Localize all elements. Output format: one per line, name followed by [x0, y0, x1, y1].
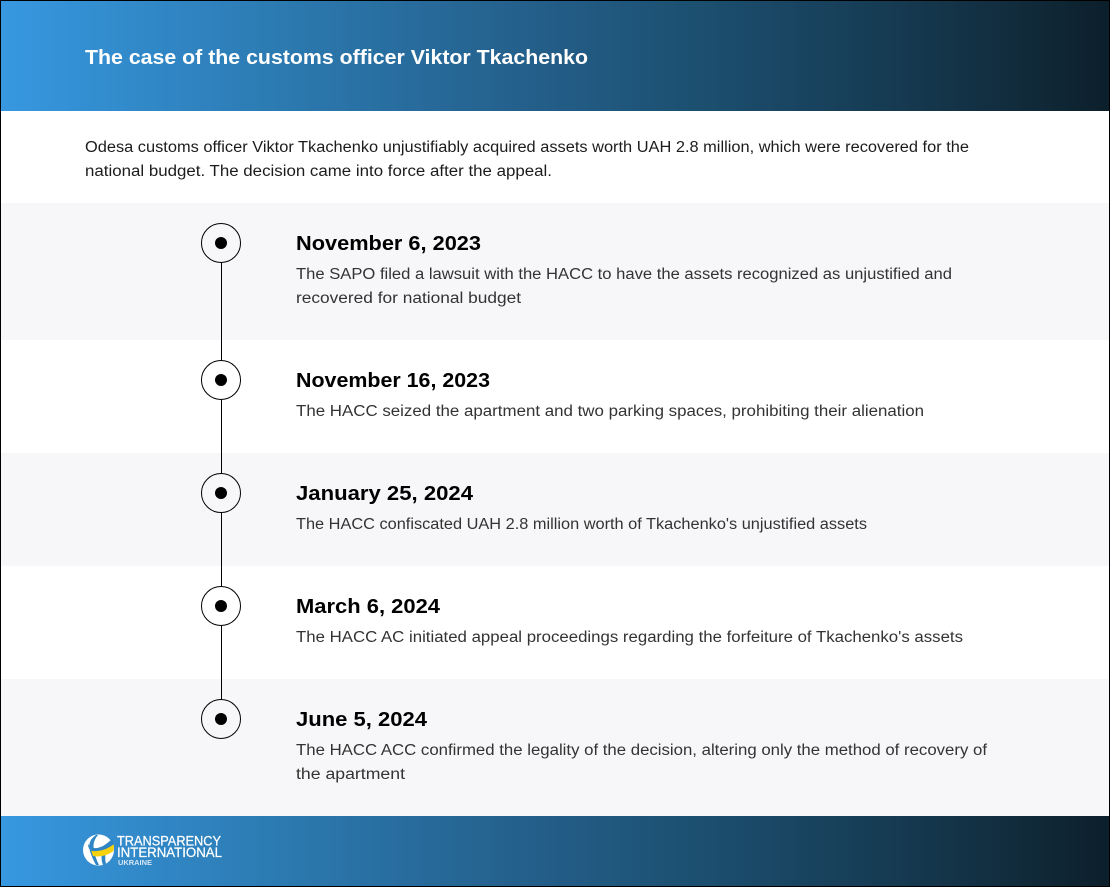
logo wordmark: UKRAINE [118, 860, 152, 867]
intro text: Odesa customs officer Viktor Tkachenko unjustifiably acquired assets worth UAH 2.8 million, which were recovered for the [85, 139, 969, 156]
event: June 5, 2024: June 5, 2024 [296, 708, 428, 731]
event: November 16, 2023: November 16, 2023 [296, 369, 490, 392]
icon: Transparency International logo [83, 834, 114, 866]
event: November 6, 2023 [296, 232, 952, 307]
timeline connector line [220, 243, 222, 719]
event: March 6, 2024 [296, 595, 963, 646]
event: November 6, 2023: recovered for national budget [296, 290, 522, 307]
event: November 16, 2023 [296, 369, 924, 420]
logo wordmark: INTERNATIONAL [117, 845, 222, 860]
timeline marker: March 6, 2024 [202, 586, 240, 626]
event: March 6, 2024: March 6, 2024 [296, 595, 441, 618]
event: January 25, 2024: The HACC confiscated UAH 2.8 million worth of Tkachenko's unjustified assets [296, 516, 867, 533]
timeline marker: June 5, 2024 [202, 700, 240, 738]
event: March 6, 2024: The HACC AC initiated appeal proceedings regarding the forfeiture of Tkachenko's assets [296, 629, 963, 646]
event: November 16, 2023: The HACC seized the apartment and two parking spaces, prohibiting their alienation [296, 403, 924, 420]
header banner [0, 0, 1110, 111]
footer banner [0, 816, 1110, 887]
timeline marker: November 16, 2023 [202, 360, 240, 400]
event: January 25, 2024 [296, 482, 867, 533]
timeline marker: January 25, 2024 [202, 474, 240, 512]
intro text: national budget. The decision came into force after the appeal. [85, 163, 552, 180]
logo wordmark: TRANSPARENCY [117, 834, 221, 848]
event: June 5, 2024: The HACC ACC confirmed the legality of the decision, altering only the method of recovery of [296, 742, 988, 759]
event: June 5, 2024 [296, 708, 988, 783]
event: November 6, 2023: November 6, 2023 [296, 232, 481, 255]
logo wordmark [117, 834, 222, 867]
title: The case of the customs officer Viktor Tkachenko [85, 46, 588, 69]
event: January 25, 2024: January 25, 2024 [296, 482, 474, 505]
panel: timeline row backgrounds [0, 203, 1110, 816]
intro text [85, 139, 969, 180]
event: November 6, 2023: The SAPO filed a lawsuit with the HACC to have the assets recognized as unjustified and [296, 266, 952, 283]
timeline marker: November 6, 2023 [202, 224, 240, 262]
event: June 5, 2024: the apartment [296, 766, 406, 783]
